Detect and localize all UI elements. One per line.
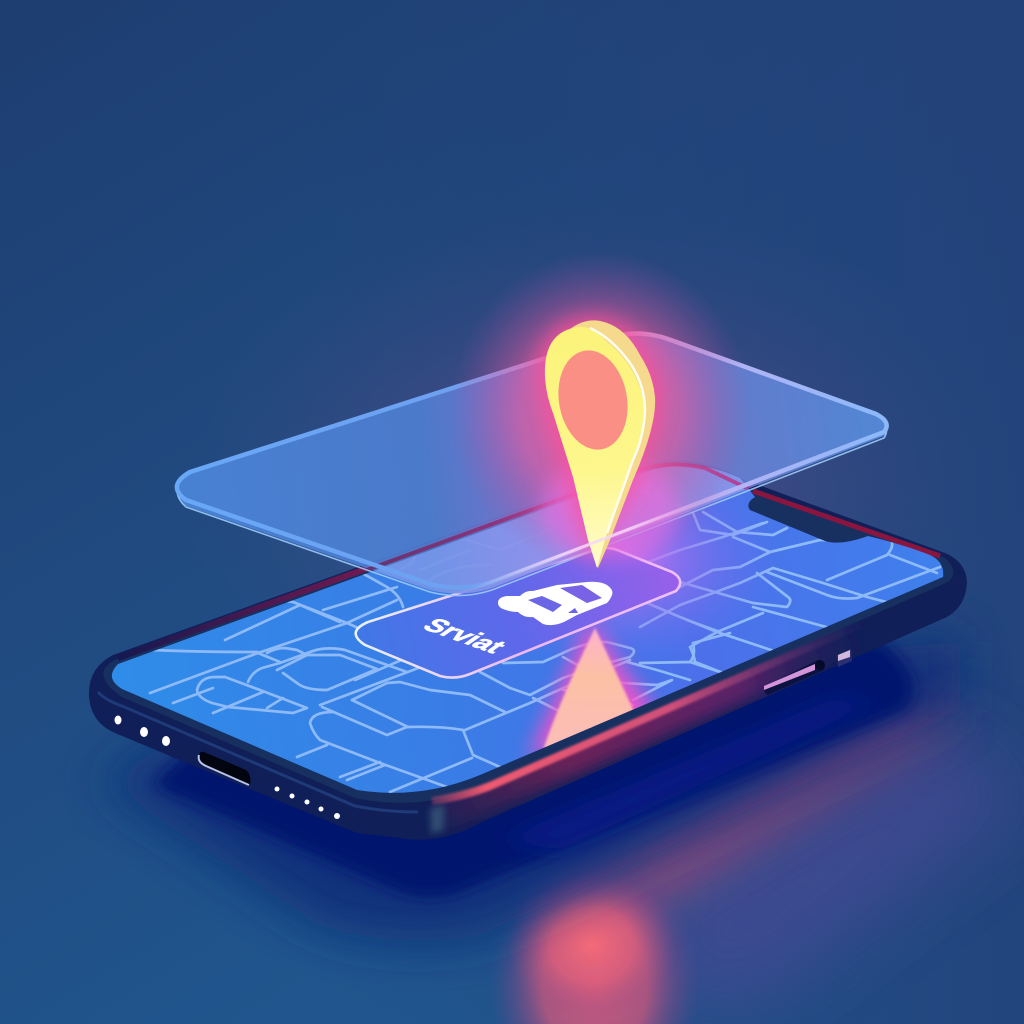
phone body — [89, 460, 967, 840]
pin side — [570, 320, 655, 568]
phone speaker dots left — [114, 716, 170, 746]
side glow — [440, 632, 860, 815]
glass panel front edge over pin — [470, 502, 700, 590]
location pin — [545, 320, 655, 568]
map magenta glow — [518, 502, 762, 758]
pin highlight — [590, 328, 645, 533]
dark red top edge — [753, 491, 940, 556]
side slot button — [764, 660, 825, 695]
bezel — [103, 468, 953, 803]
speaker dots bottom — [274, 786, 340, 819]
left side highlight — [98, 692, 418, 812]
phone shadow — [100, 640, 960, 941]
lit edge of top rim — [432, 625, 860, 801]
card label: Srviat — [416, 614, 513, 657]
screen seen through glass — [366, 462, 751, 594]
floor glow reflection — [490, 700, 1024, 1024]
phone screen — [112, 455, 943, 793]
charging port — [198, 752, 250, 785]
side square sensor — [837, 649, 852, 667]
corner sheen — [430, 805, 444, 834]
map roads — [150, 490, 940, 792]
pin hole — [551, 345, 635, 455]
icon: bus — [498, 582, 612, 625]
pin glow — [450, 250, 750, 570]
glass panel — [174, 331, 889, 596]
info card — [356, 548, 680, 678]
pin face — [545, 327, 645, 568]
reflected beam of pin on screen — [543, 628, 636, 750]
